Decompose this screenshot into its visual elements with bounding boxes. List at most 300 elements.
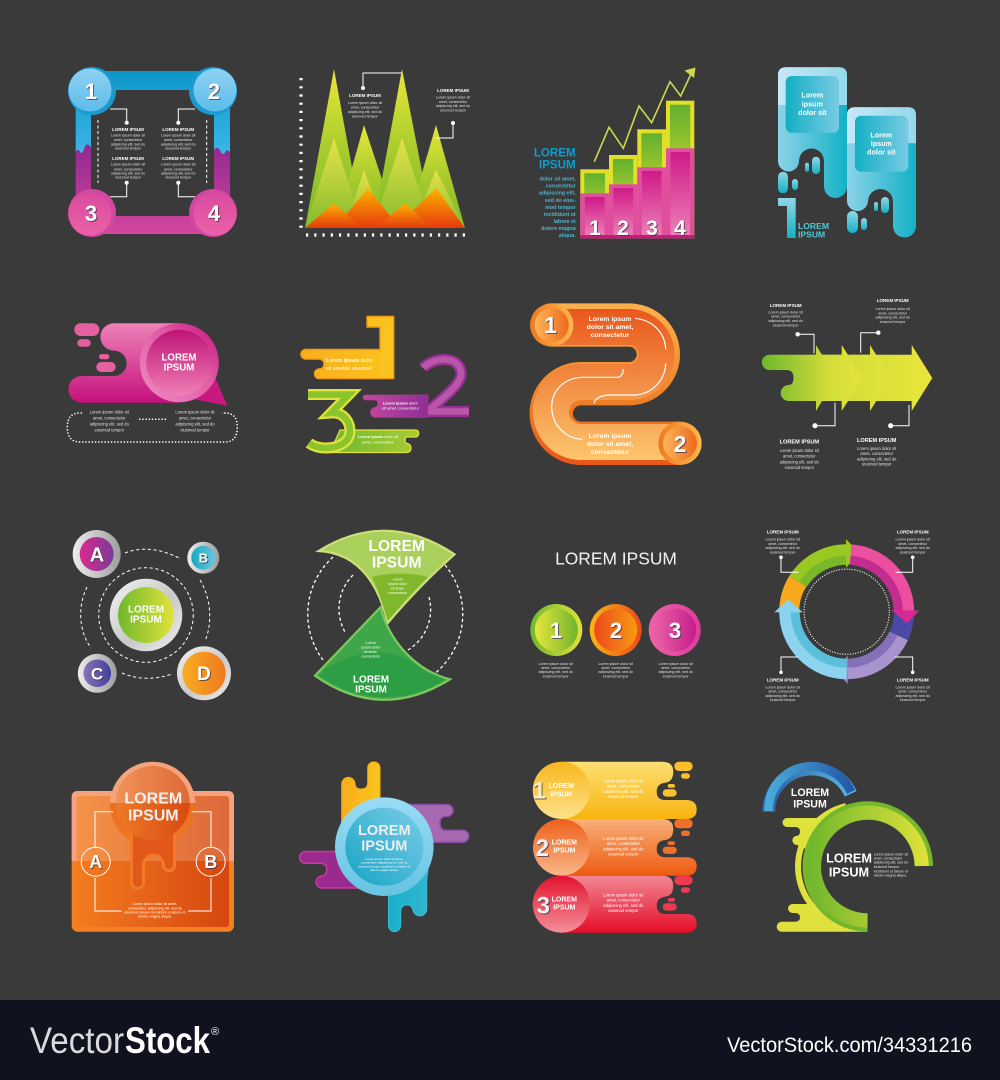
row 3: Lorem ipsum dolor sit: [603, 893, 644, 898]
panel: rising bar chart: [534, 68, 696, 240]
text 1: eiusmod tempor: [543, 674, 569, 678]
text bottom left: Lorem ipsum dolor sit: [766, 686, 800, 690]
chevron 1: [762, 345, 836, 411]
drip shape 2: dolor sit: [867, 148, 896, 157]
row 2: IPSUM: [553, 848, 576, 855]
text right: amet, consectetur: [179, 416, 212, 420]
text block: top right: LOREM IPSUM: [162, 127, 194, 132]
text bottom right: amet, consectetur: [860, 451, 894, 456]
circle 1: [530, 604, 582, 656]
middle peaks: [305, 138, 465, 228]
text 2: eiusmod tempor: [603, 674, 629, 678]
circle A: A: [90, 544, 104, 566]
text block: bottom left: adipiscing elit, sed do: [111, 171, 145, 175]
circle 3: [649, 604, 701, 656]
number 3 banner: Lorem ipsum: [358, 434, 383, 439]
road fill: [551, 327, 680, 442]
text left: amet, consectetur: [93, 416, 126, 420]
text top left: LOREM IPSUM: [767, 530, 799, 535]
top leaf: [318, 531, 454, 623]
callout right: [436, 88, 470, 138]
text block: top right: eiusmod tempor: [165, 146, 192, 150]
cyan drip: [388, 846, 431, 932]
row 1: IPSUM: [550, 791, 573, 798]
badge 1: [530, 303, 573, 347]
row 2: 2: [536, 835, 549, 862]
circle 4: 4: [208, 201, 221, 226]
circle 1: 1: [85, 79, 97, 104]
text block: bottom right: [161, 156, 195, 179]
drip outline: [130, 832, 176, 890]
road text bottom: dolor sit amet,: [587, 441, 633, 448]
text top right: eiusmod tempor: [880, 320, 906, 324]
yellow top tab: [782, 818, 835, 850]
text top left: eiusmod tempor: [770, 550, 796, 554]
outer peaks: [305, 69, 465, 228]
chevron 4: [850, 345, 932, 411]
drip shape 2: ipsum: [871, 139, 892, 148]
centre circle: [110, 579, 182, 651]
text top right: eiusmod tempor: [900, 550, 926, 554]
text 1: Lorem ipsum dolor sit: [539, 662, 573, 666]
bar numbers: 1: [589, 217, 601, 240]
text bottom right: LOREM IPSUM: [857, 438, 897, 444]
badge A: A: [89, 852, 102, 872]
top leaf: LOREM: [368, 538, 425, 555]
arc title big: IPSUM: [829, 866, 869, 880]
text left: eiusmod tempor: [95, 428, 125, 432]
text top left: [769, 303, 803, 327]
panel: winding orange road: [530, 303, 702, 465]
bar numbers: 2: [617, 217, 629, 240]
heading: IPSUM: [539, 158, 576, 172]
row 3: IPSUM: [553, 905, 576, 912]
panel: overlapping arcs: [769, 766, 924, 932]
description: dolore magna: [541, 226, 576, 232]
text top left: LOREM IPSUM: [770, 303, 802, 308]
number 1 banner: sit ametdo eiusmod: [326, 366, 372, 372]
road text bottom: consectetur: [591, 449, 630, 456]
row 3: [533, 876, 697, 933]
row 3: LOREM: [552, 897, 577, 904]
text 2: amet, consectetur: [601, 666, 631, 670]
top leaf: consectetur: [388, 591, 408, 595]
text block: bottom right: LOREM IPSUM: [162, 156, 194, 161]
circle B: B: [199, 550, 208, 565]
text top left: amet, consectetur: [768, 542, 798, 546]
row 1: adipiscing elit, sed do: [603, 789, 644, 794]
text 1: amet, consectetur: [541, 666, 571, 670]
text top right: LOREM IPSUM: [897, 530, 929, 535]
connectors: [98, 109, 207, 197]
description: incididunt ut: [544, 212, 576, 218]
blue segment: [774, 599, 847, 669]
description: incididunt ut labore et: [874, 869, 908, 873]
text block: bottom right: amet, consectetur: [164, 167, 193, 171]
row 3: 3: [537, 893, 550, 920]
panel: circle with four arms: [300, 762, 469, 932]
circle 3: 3: [85, 201, 97, 226]
road text top: dolor sit amet,: [587, 324, 633, 331]
panel: mountain area chart: [301, 69, 470, 235]
circle D: [177, 646, 231, 700]
text bottom left: LOREM IPSUM: [767, 678, 799, 683]
number 1 banner: [301, 316, 394, 379]
text block: bottom left: Lorem ipsum dolor sit: [111, 163, 145, 167]
text top left: Lorem ipsum dolor sit: [766, 538, 800, 542]
text 2: adipiscing elit, sed do: [599, 670, 633, 674]
text right: eiusmod tempor: [180, 428, 210, 432]
label: IPSUM: [798, 230, 825, 240]
number 2 banner: sit amet, consectetur: [382, 406, 420, 410]
panel: arrow chevrons: [762, 298, 932, 470]
number 3 banner: [308, 394, 419, 452]
footer logo: ®: [211, 1026, 219, 1038]
bubble circle: LOREM: [162, 353, 196, 364]
green arc: [812, 811, 924, 922]
description: dolor sit amet,: [539, 176, 576, 182]
row 3: eiusmod tempor: [608, 908, 639, 913]
footer logo: Vector: [30, 1020, 124, 1061]
connectors: [796, 330, 909, 428]
text left: adipiscing elit, sed do: [90, 422, 130, 426]
dotted inner circle: [804, 569, 889, 654]
yellow arm: [342, 762, 380, 830]
bottom leaf: LOREM: [353, 675, 389, 686]
drip shape 1: [778, 67, 847, 198]
row 1: [533, 762, 697, 819]
text block: top right: amet, consectetur: [164, 138, 193, 142]
label: LOREM: [798, 221, 829, 231]
square: [72, 791, 234, 932]
centre circle: LOREM: [128, 605, 164, 616]
title: LOREM IPSUM: [555, 549, 677, 569]
bar numbers: 4: [674, 217, 686, 240]
text 2: Lorem ipsum dolor sit: [599, 662, 633, 666]
connectors: [779, 556, 914, 674]
description: eiusmod tempor incididunt ut labore et: [358, 864, 411, 868]
row 2: Lorem ipsum dolor sit: [603, 836, 644, 841]
arc title big: LOREM: [826, 851, 872, 865]
description: labore et: [554, 219, 576, 225]
footer id: VectorStock.com/34331216: [727, 1034, 972, 1057]
row 1: 1: [533, 778, 546, 805]
description: eiusmod tempor incididunt ut labore et: [125, 910, 185, 914]
bar numbers: 3: [646, 217, 658, 240]
badge 2: 2: [674, 431, 686, 457]
number 2 banner: dolor: [408, 400, 418, 406]
pink segment: [850, 554, 919, 623]
text block: top left: amet, consectetur: [114, 138, 143, 142]
callout right: amet, consectetur: [439, 100, 468, 104]
badge B: [196, 847, 225, 876]
description: amet, consectetur: [874, 856, 903, 860]
text top right: [876, 298, 910, 324]
dashed arcs: [308, 557, 463, 675]
road text top: consectetur: [591, 332, 630, 339]
ball inner: [116, 766, 190, 840]
description: eiusmod tempor: [874, 865, 900, 869]
top leaf: ipsum dolor: [388, 582, 408, 586]
description: dolore magna aliqua.: [874, 874, 907, 878]
panel: cycle ring: [766, 530, 930, 702]
road centre line: [552, 318, 666, 439]
text bottom left: [780, 440, 820, 470]
text 3: amet, consectetur: [661, 666, 691, 670]
callout top: adipiscing elit, sed do: [348, 110, 382, 114]
circle 2: 2: [610, 618, 622, 643]
number 3 banner: amet, consectetur: [362, 440, 395, 444]
text block: bottom left: amet, consectetur: [114, 167, 143, 171]
bottom leaf: [315, 607, 450, 700]
text bottom left: Lorem ipsum dolor sit: [780, 448, 820, 453]
text top left: [766, 530, 800, 554]
panel: numbers 1 2 3 banners: [301, 316, 469, 452]
text bottom left: amet, consectetur: [783, 454, 816, 458]
circle 2: 2: [208, 79, 220, 104]
title: IPSUM: [128, 808, 179, 825]
centre circle: IPSUM: [130, 615, 162, 626]
panel: three stacked streaks: [533, 762, 697, 933]
panel: hourglass leaves: [308, 531, 463, 700]
row 1: Lorem ipsum dolor sit: [603, 779, 644, 784]
text top left: adipiscing elit, sed do: [766, 546, 800, 550]
text top right: Lorem ipsum dolor sit: [896, 538, 930, 542]
circle 1: 1: [550, 618, 562, 643]
navy segment: [899, 612, 904, 636]
bubble body: [68, 323, 179, 403]
bars: [580, 101, 694, 238]
chevron 2: [810, 345, 863, 411]
text bottom left: amet, consectetur: [768, 690, 798, 694]
callout right: adipiscing elit, sed do: [436, 104, 470, 108]
text 3: eiusmod tempor: [663, 674, 689, 678]
text top right: LOREM IPSUM: [877, 298, 909, 303]
blue arc: [769, 766, 851, 812]
number 1 banner: Lorem ipsum: [326, 358, 360, 364]
text right: Lorem ipsum dolor sit: [175, 410, 215, 414]
badge A: [81, 847, 110, 876]
panel: teal dripping labels: [778, 67, 916, 240]
circle B: [187, 542, 219, 574]
callout right: eiusmod tempor: [440, 108, 467, 112]
bottom leaf: consectetur: [361, 655, 381, 659]
dashed orbits: [81, 549, 210, 678]
panel: orbit diagram: [73, 530, 231, 700]
callout top: Lorem ipsum dolor sit: [348, 101, 382, 105]
road outline: [551, 325, 680, 443]
description: aliqua.: [559, 233, 576, 239]
text block: top left: [111, 127, 145, 150]
line frame: [95, 812, 211, 911]
panel: orange square with drip: [72, 762, 234, 932]
drip shape 2: [847, 107, 916, 238]
text block: top right: adipiscing elit, sed do: [161, 142, 195, 146]
circle 2: [189, 67, 237, 115]
callout top: [348, 73, 402, 118]
circle C: [78, 654, 117, 693]
title: IPSUM: [361, 839, 407, 855]
description: dolore magna aliqua.: [370, 868, 399, 872]
top leaf: IPSUM: [372, 554, 422, 571]
green segment: [798, 539, 859, 584]
footer logo: Stock: [125, 1020, 210, 1061]
text bottom right: eiusmod tempor: [900, 698, 926, 702]
text top right: amet, consectetur: [898, 542, 928, 546]
magenta arm: [300, 852, 420, 888]
description: consectetur adipiscing elit, sed do: [361, 861, 408, 865]
road text bottom: Lorem ipsum: [589, 433, 631, 440]
text block: top left: LOREM IPSUM: [112, 127, 144, 132]
callout top: LOREM IPSUM: [349, 93, 381, 98]
chevron 3: [820, 345, 891, 411]
axes ticks: [301, 78, 466, 235]
circle A: [73, 530, 121, 578]
text top left: adipiscing elit, sed do: [769, 319, 803, 323]
text bottom left: [766, 678, 800, 702]
dotted outline: [67, 413, 237, 442]
yellow crescent: [798, 806, 867, 928]
description: adipiscing elit,: [539, 191, 576, 197]
callout right: LOREM IPSUM: [437, 88, 469, 93]
text block: top left: Lorem ipsum dolor sit: [111, 134, 145, 138]
bubble circle: [140, 323, 219, 402]
text block: bottom left: [111, 156, 145, 179]
badge 1: 1: [544, 312, 557, 338]
text right: adipiscing elit, sed do: [175, 422, 215, 426]
text top right: amet, consectetur: [878, 311, 908, 315]
text bottom right: eiusmod tempor: [862, 462, 892, 467]
text bottom left: adipiscing elit, sed do: [766, 694, 800, 698]
callout right: Lorem ipsum dolor sit: [436, 96, 470, 100]
trend arrow: [594, 68, 696, 162]
text block: top left: adipiscing elit, sed do: [111, 142, 145, 146]
description: Lorem ipsum dolor sit amet,: [133, 902, 177, 906]
circle 4: [189, 189, 237, 237]
row 2: [533, 819, 697, 876]
panel: numbered square frame: [68, 67, 237, 237]
big number 1: [778, 198, 796, 238]
frame bottom pink: [76, 144, 230, 234]
drip shape 1: ipsum: [802, 100, 823, 109]
text block: top right: [161, 127, 195, 150]
text block: top right: Lorem ipsum dolor sit: [161, 134, 195, 138]
frame top blue: [76, 71, 230, 154]
text bottom right: Lorem ipsum dolor sit: [896, 686, 930, 690]
text bottom right: amet, consectetur: [898, 690, 928, 694]
text bottom left: eiusmod tempor: [770, 698, 796, 702]
bar numbers: [589, 217, 686, 240]
text block: bottom right: Lorem ipsum dolor sit: [161, 163, 195, 167]
text 3: adipiscing elit, sed do: [659, 670, 693, 674]
text bottom right: LOREM IPSUM: [897, 678, 929, 683]
callout top: eiusmod tempor: [352, 114, 379, 118]
footer band: [0, 1000, 1000, 1080]
description: Lorem ipsum dolor sit amet,: [365, 857, 404, 861]
purple segment: [835, 634, 899, 684]
top leaf: sit amet,: [391, 586, 404, 590]
text top right: [896, 530, 930, 554]
circle 3: [68, 189, 116, 237]
text bottom right: [857, 438, 897, 467]
drip shape 1: Lorem: [801, 91, 823, 100]
text top left: amet, consectetur: [771, 315, 801, 319]
row 2: eiusmod tempor: [608, 851, 639, 856]
callout top: amet, consectetur: [351, 106, 380, 110]
number 1 banner: dolor: [359, 358, 373, 364]
text left: Lorem ipsum dolor sit: [90, 410, 130, 414]
road text top: Lorem ipsum: [589, 316, 631, 323]
arc title small: IPSUM: [793, 798, 827, 810]
circle C: C: [91, 664, 103, 683]
drip shape 2: Lorem: [870, 130, 892, 139]
panel: speech bubble: [67, 323, 237, 442]
panel: three numbered circles: [530, 549, 701, 678]
text bottom left: adipiscing elit, sed do: [780, 459, 820, 464]
text block: bottom left: eiusmod tempor: [115, 175, 142, 179]
text top right: adipiscing elit, sed do: [896, 546, 930, 550]
text block: bottom right: eiusmod tempor: [165, 175, 192, 179]
text top left: Lorem ipsum dolor sit: [769, 310, 803, 314]
text top left: eiusmod tempor: [773, 323, 799, 327]
text 3: Lorem ipsum dolor sit: [659, 662, 693, 666]
text bottom left: LOREM IPSUM: [780, 440, 819, 446]
row 1: amet, consectetur: [607, 784, 641, 789]
badge B: B: [204, 852, 217, 872]
row 2: adipiscing elit, sed do: [603, 846, 644, 851]
text block: top left: eiusmod tempor: [115, 146, 142, 150]
description: adipiscing elit, sed do: [874, 861, 908, 865]
row 1: LOREM: [549, 783, 574, 790]
bottom leaf: ipsum dolor: [361, 646, 381, 650]
main circle: [335, 797, 434, 896]
description: mod tempor: [545, 205, 576, 211]
number 3 banner: dolor sit: [383, 434, 399, 439]
row 3: amet, consectetur: [607, 898, 641, 903]
circle D: D: [197, 664, 211, 685]
row 3: adipiscing elit, sed do: [603, 903, 644, 908]
drip shape 1: dolor sit: [798, 108, 827, 117]
text 1: adipiscing elit, sed do: [539, 670, 573, 674]
description: dolore magna aliqua.: [138, 914, 172, 918]
arc title small: LOREM: [791, 787, 829, 799]
orange peaks: [305, 188, 465, 228]
text block: bottom left: LOREM IPSUM: [112, 156, 144, 161]
circle 3: 3: [669, 618, 681, 643]
heading: LOREM: [534, 147, 576, 160]
description: consectetur: [546, 184, 576, 190]
bottom leaf: Lorem: [366, 641, 376, 645]
text bottom right: Lorem ipsum dolor sit: [857, 446, 897, 451]
ball outer: [110, 762, 195, 847]
top leaf: Lorem: [393, 578, 403, 582]
yellow bottom tab: [777, 904, 867, 932]
row 1: eiusmod tempor: [608, 794, 639, 799]
text top right: adipiscing elit, sed do: [876, 316, 910, 320]
text top right: Lorem ipsum dolor sit: [876, 307, 910, 311]
bubble circle: IPSUM: [164, 362, 194, 374]
title: LOREM: [358, 823, 411, 839]
drip pills: [778, 157, 889, 233]
number 2 banner: [363, 360, 469, 417]
circle 2: [590, 604, 642, 656]
text bottom right: [896, 678, 930, 702]
bottom leaf: IPSUM: [355, 685, 387, 696]
badge 2: [658, 422, 702, 465]
description: sed do eius-: [545, 198, 576, 204]
text bottom left: eiusmod tempor: [785, 465, 815, 470]
text bottom right: adipiscing elit, sed do: [857, 456, 897, 461]
